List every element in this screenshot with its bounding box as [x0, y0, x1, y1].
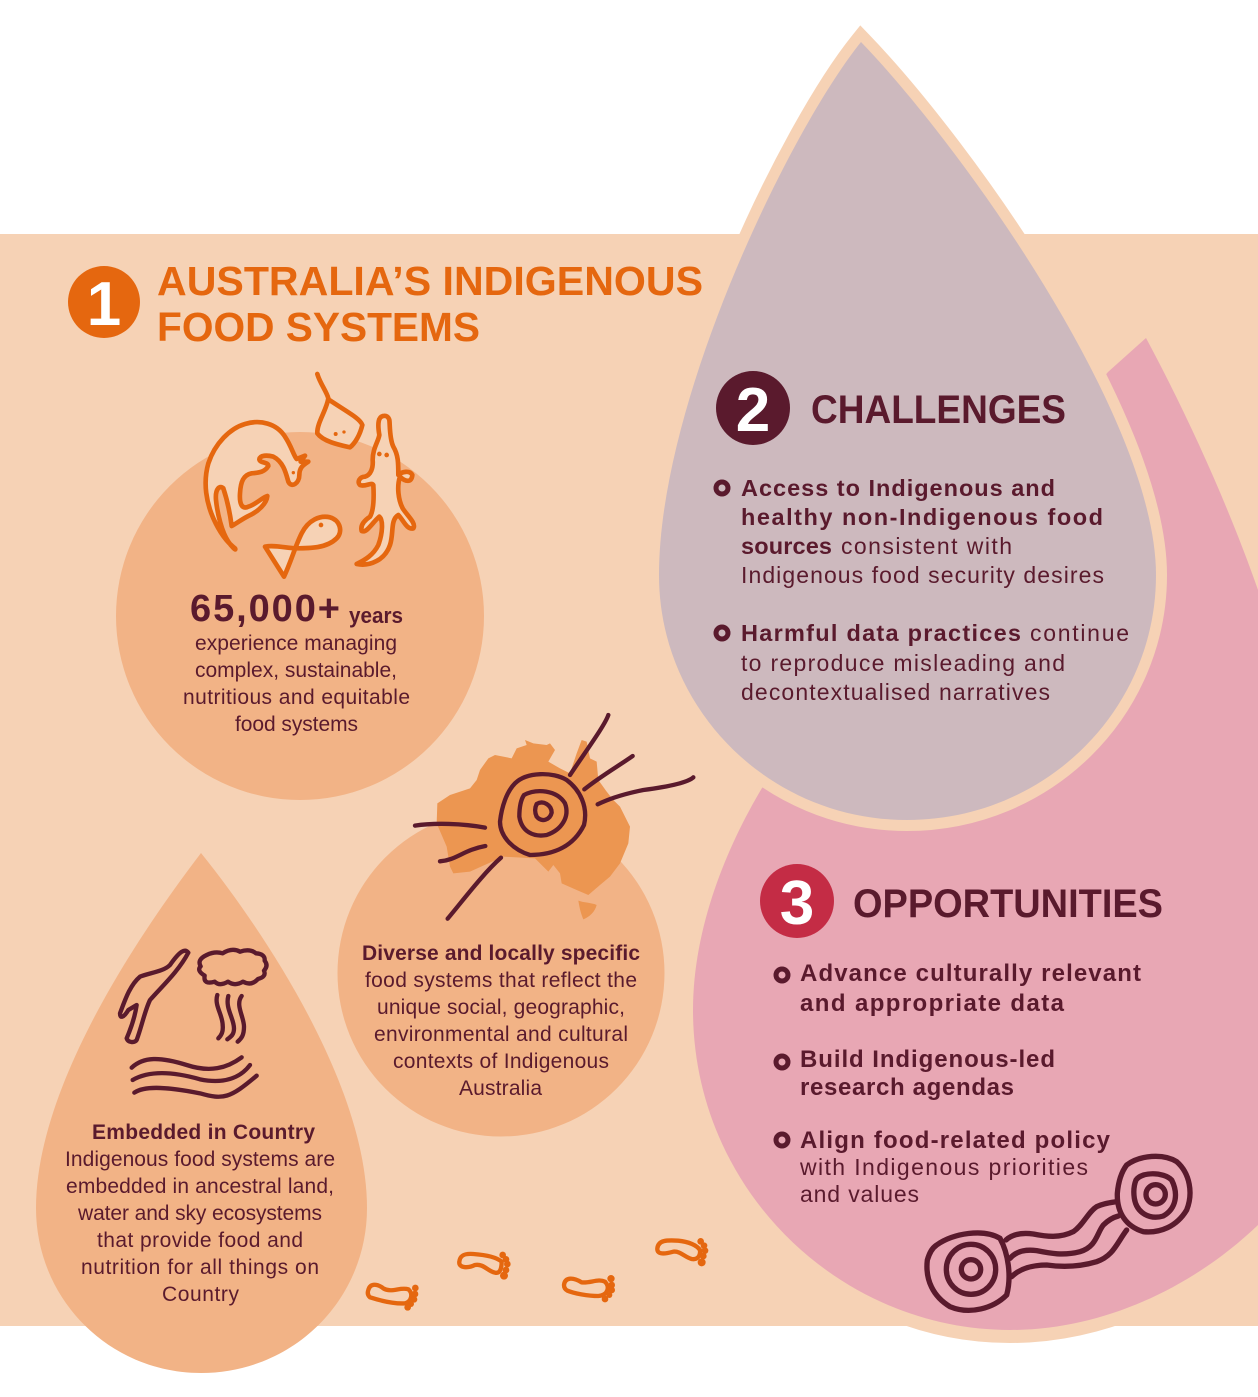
text: experience description — [183, 632, 410, 736]
title: AUSTRALIA’S INDIGENOUS — [157, 258, 703, 304]
text: embedded in Country: water and sky ecosystems — [77, 1202, 322, 1225]
heading: challenges: CHALLENGES — [811, 388, 1066, 432]
bullet: food-related policy: and values — [800, 1181, 919, 1207]
bullet: harmful data practices: Harmful data practices — [741, 620, 1021, 646]
text: embedded in Country: that provide food and — [97, 1229, 303, 1252]
bullet: access to food — [716, 475, 1104, 588]
bullet: harmful data practices: continue — [1030, 620, 1129, 646]
text: experience description: nutritious and equitable — [183, 686, 410, 709]
panel: challenges drop — [659, 42, 1156, 820]
bullet: culturally relevant data — [776, 960, 1141, 1017]
bullet: food-related policy — [776, 1127, 1111, 1207]
bullet: harmful data practices — [716, 620, 1129, 705]
text: embedded in Country: Country — [162, 1283, 240, 1306]
bullet: harmful data practices: to reproduce misleading and — [741, 650, 1065, 676]
text: experience description: food systems — [235, 713, 358, 736]
panel: locally specific circle — [338, 715, 693, 1136]
text: diverse food systems: food systems that reflect the — [365, 969, 637, 992]
icon: land, sky and water — [120, 950, 267, 1097]
text: experience description: experience managing — [195, 632, 397, 655]
bullet: research agendas — [776, 1046, 1055, 1101]
icon: connected circles — [927, 1156, 1190, 1310]
number badge 2 — [716, 371, 790, 445]
text: diverse food systems: environmental and cultural — [374, 1023, 628, 1046]
title — [157, 258, 703, 350]
number badge 1: 1 — [87, 270, 121, 339]
text: diverse food systems: contexts of Indigenous — [393, 1050, 609, 1073]
bullet: access to food: consistent with — [841, 533, 1012, 559]
bullet: research agendas: research agendas — [800, 1074, 1014, 1101]
text: embedded in Country: nutrition for all things on — [81, 1256, 319, 1279]
bullet: food-related policy: Align food-related policy — [800, 1127, 1111, 1154]
panel: opportunities drop — [693, 338, 1258, 1330]
number badge 3: 3 — [780, 869, 814, 938]
bullet: culturally relevant data: and appropriate data — [800, 990, 1065, 1017]
number badge 1 — [68, 266, 140, 339]
text: embedded in Country: embedded in ancestral land, — [66, 1175, 334, 1198]
background band — [0, 234, 1258, 1326]
text: embedded in Country — [65, 1121, 335, 1306]
icon: animals — [206, 374, 414, 577]
text: embedded in Country: Indigenous food systems are — [65, 1148, 335, 1171]
text: diverse food systems: unique social, geographic, — [377, 996, 625, 1019]
bullet: harmful data practices: decontextualised narratives — [741, 679, 1050, 705]
text: experience description: complex, sustainable, — [195, 659, 397, 682]
stat: 65,000+ years: 65,000+ — [190, 588, 340, 630]
text: diverse food systems: Australia — [459, 1077, 542, 1100]
bullet: access to food: sources — [741, 533, 832, 559]
title: FOOD SYSTEMS — [157, 304, 480, 350]
bullet: culturally relevant data: Advance culturally relevant — [800, 960, 1141, 987]
bullet: access to food: Access to Indigenous and — [741, 475, 1055, 501]
text: diverse food systems: Diverse and locally specific — [362, 942, 640, 965]
icon: Australia map with circles — [415, 715, 693, 919]
bullet: food-related policy: with Indigenous priorities — [799, 1154, 1088, 1180]
panel: embedded in Country drop — [36, 853, 367, 1373]
bullet: access to food: Indigenous food security desires — [741, 562, 1104, 588]
text: embedded in Country: Embedded in Country — [92, 1121, 315, 1144]
stat: 65,000+ years: years — [349, 603, 403, 628]
number badge 3 — [760, 864, 834, 938]
bullet: research agendas: Build Indigenous-led — [800, 1046, 1055, 1073]
bullet: access to food: healthy non-Indigenous food — [741, 504, 1103, 530]
number badge 2: 2 — [736, 376, 770, 445]
panel: 65,000+ years circle — [116, 374, 484, 800]
icon: footprints — [368, 1238, 708, 1311]
heading: opportunities: OPPORTUNITIES — [853, 882, 1163, 926]
text: diverse food systems — [362, 942, 640, 1100]
